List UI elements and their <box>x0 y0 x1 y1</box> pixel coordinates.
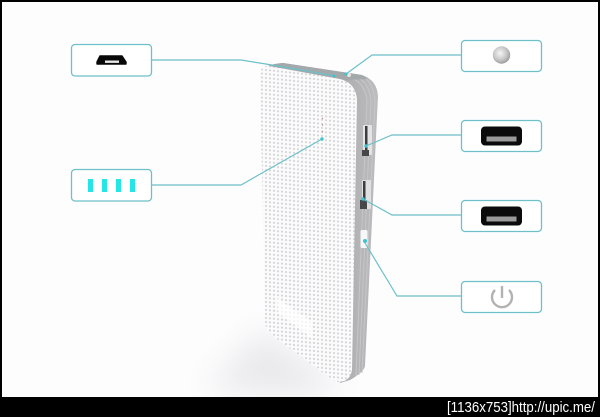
connector: power button <box>365 243 461 296</box>
USB port two <box>360 180 371 209</box>
front lower highlight <box>277 298 312 338</box>
panel: battery indicator <box>72 170 152 201</box>
connector: battery indicator <box>152 139 322 185</box>
indicator pinholes <box>322 118 323 132</box>
device top strip <box>268 63 368 80</box>
icon: micro USB port <box>97 56 126 64</box>
panel: micro USB <box>72 44 152 76</box>
panel: power button <box>462 282 542 312</box>
connector: micro USB <box>152 60 335 76</box>
device side and top shell <box>262 63 378 383</box>
power bank device <box>260 63 378 383</box>
icon: USB socket <box>481 126 522 146</box>
side ridges <box>352 76 375 376</box>
panel: LED light <box>462 40 542 72</box>
icon: USB socket <box>481 206 522 226</box>
floor shadow <box>220 336 326 397</box>
panel: USB port one <box>462 120 542 152</box>
power button <box>360 230 368 248</box>
icon: four battery LEDs <box>88 179 135 192</box>
icon: LED ball <box>493 46 510 64</box>
device front face <box>260 66 357 382</box>
connector end dots <box>320 72 368 243</box>
connector: LED <box>346 55 461 74</box>
LED hole <box>347 73 351 77</box>
connector: USB one <box>366 135 461 146</box>
connector: USB two <box>363 199 461 215</box>
USB port one <box>362 125 372 156</box>
icon: power symbol <box>492 286 512 307</box>
connector lines <box>152 55 461 296</box>
panel: USB port two <box>462 200 542 232</box>
